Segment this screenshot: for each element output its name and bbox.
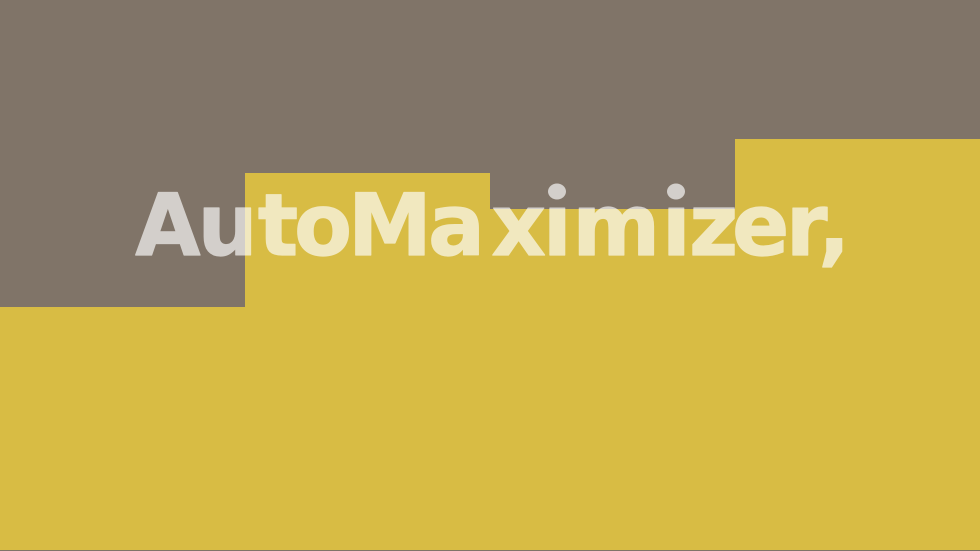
title: AutoMaximizer,	[135, 176, 850, 276]
infographic canvas	[0, 139, 980, 550]
stepped yellow blocks	[0, 139, 980, 550]
